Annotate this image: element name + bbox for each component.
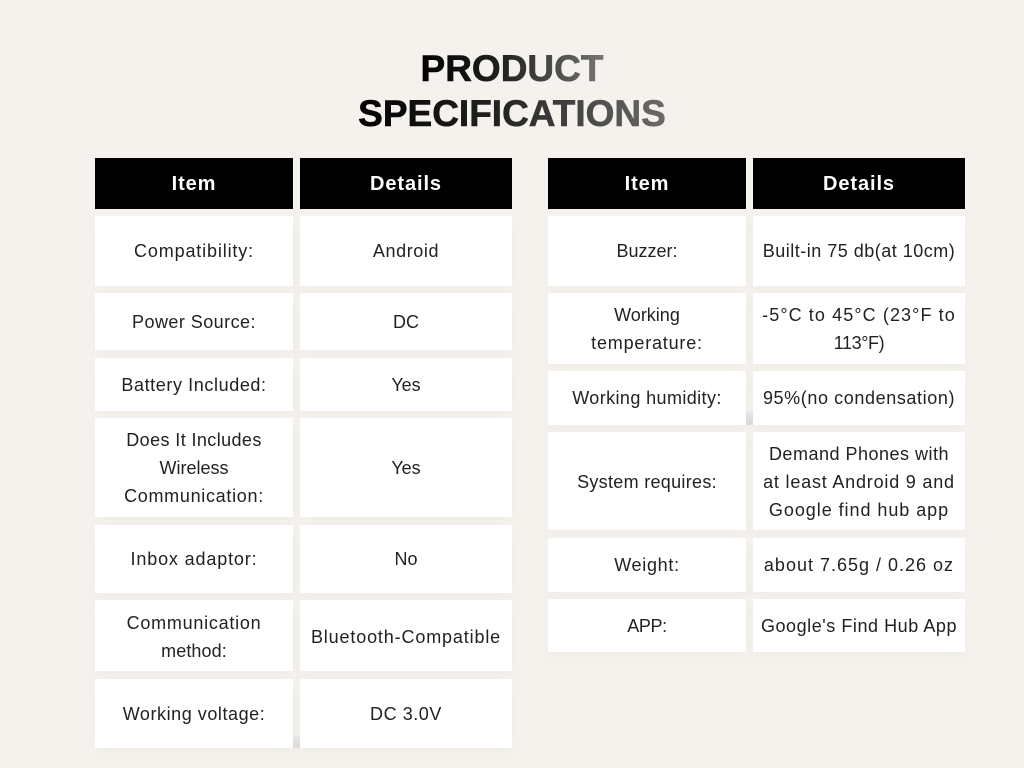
value: power source <box>300 293 512 350</box>
label: communication method: method: <box>161 640 227 660</box>
value: system requires: at least Android 9 and <box>763 472 955 492</box>
value: buzzer: Built-in 75 db(at 10cm) <box>763 241 955 261</box>
label: working temperature <box>548 293 746 364</box>
label: working voltage: Working voltage: <box>123 704 265 724</box>
value: working temperature: 113°F) <box>834 332 884 352</box>
label: power source: Power Source: <box>132 312 256 332</box>
label: wireless communication: Does It Includes <box>126 430 262 450</box>
label: app: APP: <box>627 616 667 636</box>
value: weight: about 7.65g / 0.26 oz <box>764 555 954 575</box>
value: system requires: Demand Phones with <box>769 444 949 464</box>
label: working voltage <box>95 679 293 748</box>
header: details: Details <box>370 172 442 194</box>
value: communication method: Bluetooth-Compatible <box>311 626 501 646</box>
label: weight <box>548 538 746 592</box>
value: working temperature <box>753 293 965 364</box>
value: wireless communication <box>300 418 512 517</box>
header: details: Details <box>823 172 895 194</box>
panel: left table <box>95 158 512 748</box>
value: inbox adaptor <box>300 525 512 593</box>
label: working temperature: Working <box>614 304 680 324</box>
value: buzzer <box>753 216 965 286</box>
value: working voltage <box>300 679 512 748</box>
value: wireless communication: Yes <box>391 458 421 478</box>
label: working humidity: Working humidity: <box>572 388 722 408</box>
label: battery included: Battery Included: <box>121 374 267 394</box>
label: wireless communication: Wireless <box>159 458 228 478</box>
value: system requires: Google find hub app <box>769 500 949 520</box>
panel: right table <box>548 158 965 652</box>
value: working humidity <box>753 371 965 425</box>
label: wireless communication: Communication: <box>124 486 264 506</box>
label: system requires <box>548 432 746 530</box>
label: app <box>548 599 746 652</box>
header: item: Item <box>625 172 669 194</box>
label: battery included <box>95 358 293 411</box>
label: working humidity <box>548 371 746 425</box>
label: buzzer: Buzzer: <box>616 241 678 261</box>
title: PRODUCT <box>421 48 604 89</box>
label: communication method: Communication <box>127 612 261 632</box>
value: app <box>753 599 965 652</box>
value: battery included: Yes <box>391 374 421 394</box>
label: power source <box>95 293 293 350</box>
label: weight: Weight: <box>614 555 680 575</box>
header: item <box>548 158 746 209</box>
label: compatibility: Compatibility: <box>134 241 254 261</box>
title: SPECIFICATIONS <box>358 93 666 134</box>
title <box>358 48 666 134</box>
label: compatibility <box>95 216 293 286</box>
value: compatibility: Android <box>373 241 439 261</box>
header: details <box>753 158 965 209</box>
header: details <box>300 158 512 209</box>
label: wireless communication <box>95 418 293 517</box>
value: app: Google's Find Hub App <box>761 616 957 636</box>
label: system requires: System requires: <box>577 472 717 492</box>
label: buzzer <box>548 216 746 286</box>
value: battery included <box>300 358 512 411</box>
value: inbox adaptor: No <box>394 549 418 569</box>
value: working humidity: 95%(no condensation) <box>763 388 955 408</box>
label: communication method <box>95 600 293 671</box>
header: item <box>95 158 293 209</box>
value: compatibility <box>300 216 512 286</box>
value: working voltage: DC 3.0V <box>370 704 442 724</box>
label: working temperature: temperature: <box>591 332 703 352</box>
value: system requires <box>753 432 965 530</box>
label: inbox adaptor: Inbox adaptor: <box>130 549 257 569</box>
value: weight <box>753 538 965 592</box>
value: power source: DC <box>393 312 419 332</box>
value: working temperature: -5°C to 45°C (23°F to <box>762 304 956 324</box>
value: communication method <box>300 600 512 671</box>
label: inbox adaptor <box>95 525 293 593</box>
header: item: Item <box>172 172 216 194</box>
